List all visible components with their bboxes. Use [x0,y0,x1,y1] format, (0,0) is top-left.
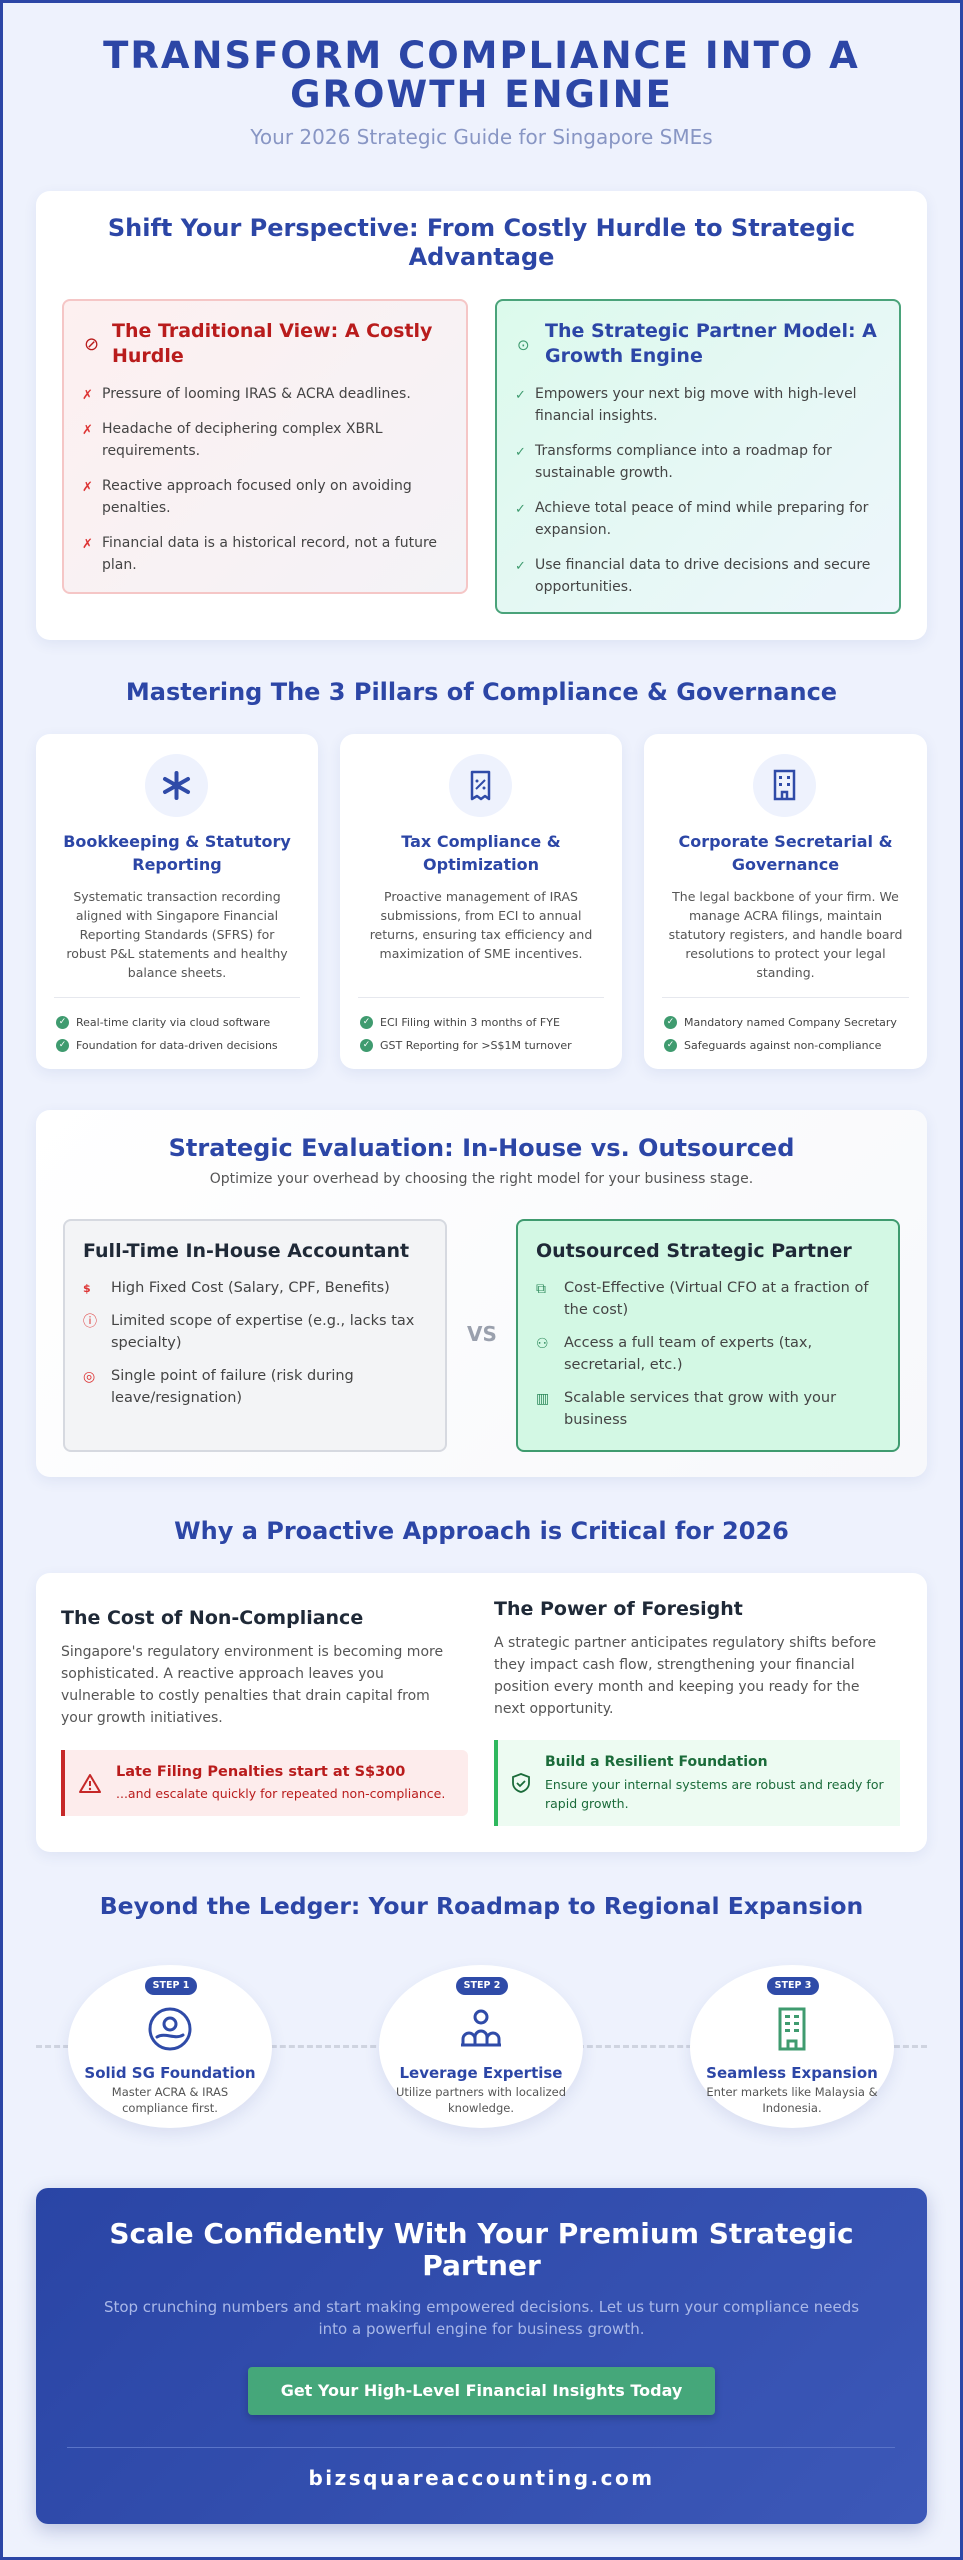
panel: strategic partner [495,299,901,614]
box heading [112,320,432,367]
pillar card: corporate secretarial: The legal backbone of your firm. We manage ACRA filings, maintain statutory registers, and handle board resolutions to protect your legal standing. [669,889,902,980]
pillar card: bookkeeping: Foundation for data-driven decisions [76,1039,278,1052]
title [103,34,860,116]
panel: traditional view [62,299,468,594]
cta text: into a powerful engine for business growth. [318,2320,644,2338]
icon: receipt [449,754,512,817]
panel: outsourced [516,1219,900,1452]
list: drawbacks: Pressure of looming IRAS & ACRA deadlines. [102,386,411,402]
panel: shift perspective [36,191,927,640]
step 2 [379,1965,583,2128]
list: drawbacks: Reactive approach focused only on avoiding penalties. [102,478,412,516]
cta heading: Scale Confidently With Your Premium Strategic [109,2217,854,2250]
column: cost of non-compliance [61,1607,443,1726]
step 1: Solid SG Foundation [84,2064,256,2082]
panel: in-house: ⓘ [83,1314,97,1330]
panel: outsourced: Scalable services that grow with your business [564,1390,836,1428]
icon: asterisk [145,754,208,817]
list: benefits: ✓ [515,502,526,517]
pillar card: tax: Proactive management of IRAS submissions, from ECI to annual returns, ensuring tax efficiency and maximization of SME incentives. [370,889,592,961]
box heading: Growth Engine [545,345,703,367]
panel: in-house: Limited scope of expertise (e.g., lacks tax specialty) [111,1313,414,1351]
pillar card: bookkeeping: Systematic transaction recording aligned with Singapore Financial Reporting Standards (SFRS) for robust P&L statements and healthy balance sheets. [66,889,288,980]
panel: outsourced: Outsourced Strategic Partner [536,1240,852,1262]
step 1: Master ACRA & IRAS [112,2085,228,2099]
list: benefits: Transforms compliance into a roadmap for sustainable growth. [535,443,832,481]
icon: shield [512,1773,530,1793]
pillar card: corporate secretarial: Corporate Secretarial & Governance [678,832,893,874]
list: benefits: ✓ [515,559,526,574]
panel: in-house: Full-Time In-House Accountant [83,1240,409,1262]
panel: outsourced: Access a full team of experts (tax, secretarial, etc.) [564,1335,812,1373]
step 3: Enter markets like Malaysia & [706,2085,878,2099]
button [248,2367,715,2415]
callout: resilient foundation [494,1740,900,1826]
button: Get Your High-Level Financial Insights Today [281,2381,682,2400]
pillar card: bookkeeping: Real-time clarity via cloud software [76,1016,270,1029]
panel: outsourced: ▥ [536,1391,549,1407]
panel: in-house: $ [83,1282,91,1295]
cta text: Stop crunching numbers and start making empowered decisions. Let us turn your compliance needs [104,2298,859,2316]
column: power of foresight [494,1598,876,1717]
icon: prohibited: ⊘ [84,334,99,355]
subtitle: Your 2026 Strategic Guide for Singapore SMEs [250,125,713,149]
box heading: Hurdle [112,345,184,367]
pillar card: bookkeeping [36,734,318,1069]
panel: in-house: ◎ [83,1369,95,1385]
pillar card: tax: Tax Compliance & Optimization [401,832,561,874]
vs label: VS [467,1322,497,1346]
panel: outsourced: ⚇ [536,1336,549,1352]
pillar card: tax: ECI Filing within 3 months of FYE [380,1016,560,1029]
callout: penalty: ...and escalate quickly for repeated non-compliance. [116,1786,445,1801]
pillar card: tax: GST Reporting for >S$1M turnover [380,1039,572,1052]
list: drawbacks: ✗ [82,480,93,495]
cta text [104,2298,859,2338]
panel: proactive [36,1573,927,1852]
list: benefits: Achieve total peace of mind while preparing for expansion. [535,500,868,538]
list: drawbacks: Financial data is a historical record, not a future plan. [102,535,437,573]
heading: Shift Your Perspective: From Costly Hurdle to Strategic Advantage [108,214,855,271]
column: cost of non-compliance: Singapore's regulatory environment is becoming more sophisticated. A reactive approach leaves you vulnerable to costly penalties that drain capital from your growth initiatives. [61,1644,443,1726]
list: benefits: Use financial data to drive decisions and secure opportunities. [535,557,870,595]
panel: in-house: Single point of failure (risk during leave/resignation) [111,1368,354,1406]
panel: call to action [36,2188,927,2524]
cta heading: Partner [422,2249,541,2282]
step 2: knowledge. [448,2101,514,2115]
panel: pillars [36,734,927,1073]
title: TRANSFORM COMPLIANCE INTO A [103,34,860,77]
list: drawbacks: ✗ [82,537,93,552]
icon: check circle: ⊙ [517,336,530,354]
list: drawbacks: Headache of deciphering complex XBRL requirements. [102,421,383,459]
cta heading [109,2217,854,2282]
list: benefits: ✓ [515,445,526,460]
subheading: Optimize your overhead by choosing the right model for your business stage. [210,1171,753,1187]
box heading: The Traditional View: A Costly [112,320,432,342]
box heading: The Strategic Partner Model: A [545,320,877,342]
column: power of foresight: A strategic partner anticipates regulatory shifts before they impact cash flow, strengthening your financial position every month and keeping you ready for the next opportunity. [494,1635,876,1717]
heading: roadmap: Beyond the Ledger: Your Roadmap to Regional Expansion [100,1892,863,1920]
panel: in-house [63,1219,447,1452]
website: bizsquareaccounting.com [308,2466,655,2490]
callout: resilient foundation: Ensure your internal systems are robust and ready for rapid growth. [545,1777,884,1811]
panel: in-house: High Fixed Cost (Salary, CPF, Benefits) [111,1280,390,1296]
list: benefits: Empowers your next big move with high-level financial insights. [535,386,857,424]
step 1: compliance first. [122,2101,218,2115]
panel: outsourced: ⧉ [536,1281,546,1297]
pillar card: bookkeeping: Bookkeeping & Statutory Reporting [63,832,291,874]
heading: proactive: Why a Proactive Approach is Critical for 2026 [174,1517,789,1545]
step 3: STEP 3 [775,1980,811,1991]
list: drawbacks [82,386,437,573]
panel: outsourced: Cost-Effective (Virtual CFO at a fraction of the cost) [564,1280,868,1318]
pillar card: corporate secretarial [644,734,927,1069]
list: drawbacks: ✗ [82,423,93,438]
list: benefits [515,386,870,595]
step 2: Utilize partners with localized [396,2085,566,2099]
panel: evaluation [36,1110,927,1477]
list: benefits: ✓ [515,388,526,403]
icon: warning [79,1774,101,1793]
list: drawbacks: ✗ [82,388,93,403]
pillar card: tax [340,734,622,1069]
icon: foundation [148,2008,192,2050]
heading: Strategic Evaluation: In-House vs. Outsourced [169,1134,794,1162]
step 1: STEP 1 [153,1980,189,1991]
callout: resilient foundation: Build a Resilient Foundation [545,1754,768,1770]
step 1 [68,1965,272,2128]
icon: team [461,2010,501,2046]
icon: office building [778,2008,806,2050]
step 3: Indonesia. [762,2101,822,2115]
icon: building [753,754,816,817]
title: GROWTH ENGINE [290,73,673,116]
step 2: STEP 2 [464,1980,500,1991]
step 3 [690,1965,894,2128]
callout: penalty: Late Filing Penalties start at S$300 [116,1764,405,1780]
callout: penalty [61,1750,468,1816]
pillar card: corporate secretarial: Safeguards against non-compliance [684,1039,881,1052]
dashed connector line [36,2045,927,2048]
box heading [545,320,877,367]
step 3: Seamless Expansion [706,2064,878,2082]
heading: pillars: Mastering The 3 Pillars of Compliance & Governance [126,678,837,706]
column: cost of non-compliance: The Cost of Non-Compliance [61,1607,363,1629]
column: power of foresight: The Power of Foresight [494,1598,743,1620]
pillar card: corporate secretarial: Mandatory named Company Secretary [684,1016,897,1029]
step 2: Leverage Expertise [400,2064,562,2082]
